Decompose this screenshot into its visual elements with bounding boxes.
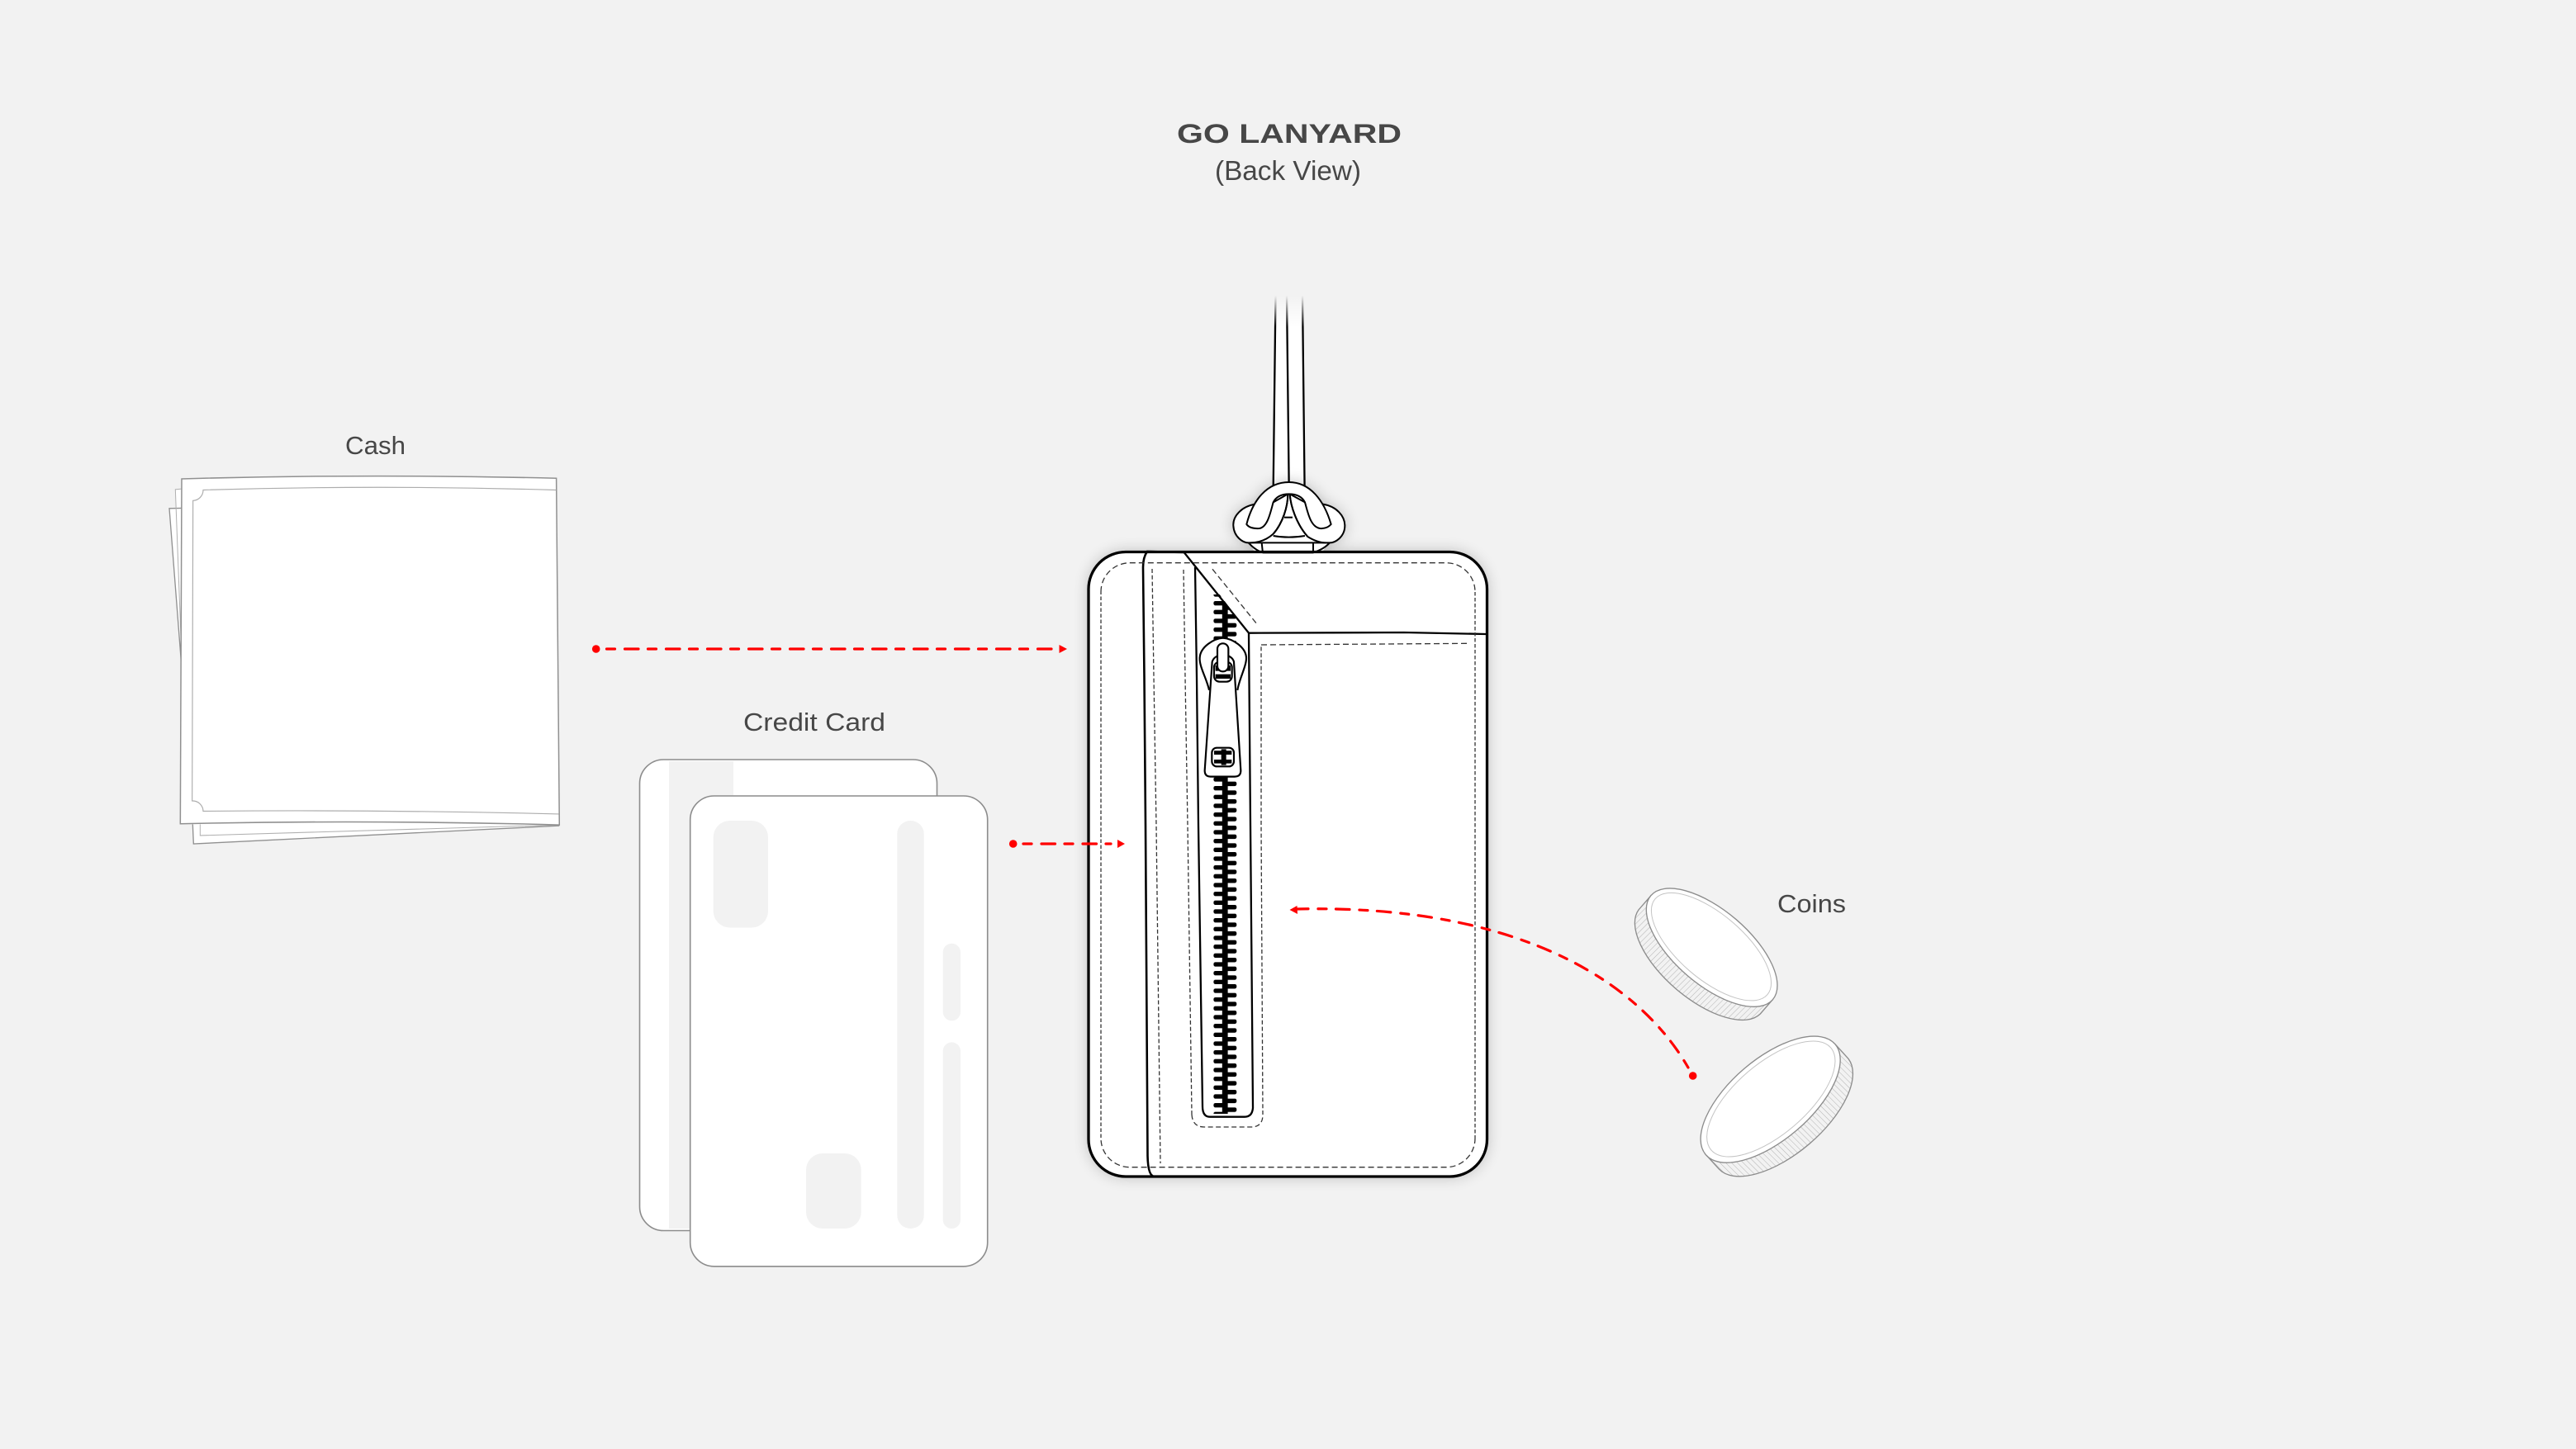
icon: credit cards <box>639 760 988 1267</box>
back card <box>639 760 937 1230</box>
arrow: credit card to wallet <box>1009 840 1125 848</box>
arrow: cash to wallet <box>592 645 1067 653</box>
icon: lanyard strap <box>1274 296 1305 487</box>
wallet outline <box>1089 552 1487 1177</box>
title: GO LANYARD <box>1177 119 1402 149</box>
icon: coin top <box>1627 867 1797 1028</box>
zipper opening <box>1184 552 1253 1117</box>
label: credit card: Credit Card <box>743 708 885 736</box>
label: coins: Coins <box>1777 889 1846 918</box>
icon: coin bottom <box>1680 1013 1862 1186</box>
zipper pull <box>1200 638 1246 777</box>
knot <box>1233 482 1345 553</box>
stitching <box>1101 563 1475 1167</box>
subtitle: (Back View) <box>1215 155 1361 186</box>
label: cash: Cash <box>345 431 406 460</box>
pocket edge <box>1249 632 1486 634</box>
front card <box>690 796 988 1267</box>
left panel seam <box>1143 552 1184 1177</box>
icon: cash bills <box>169 476 559 844</box>
arrow: coins to wallet <box>1290 906 1696 1080</box>
zipper teeth <box>1213 590 1238 1119</box>
wallet with knot <box>1089 482 1487 1177</box>
wallet base <box>1089 482 1487 1177</box>
